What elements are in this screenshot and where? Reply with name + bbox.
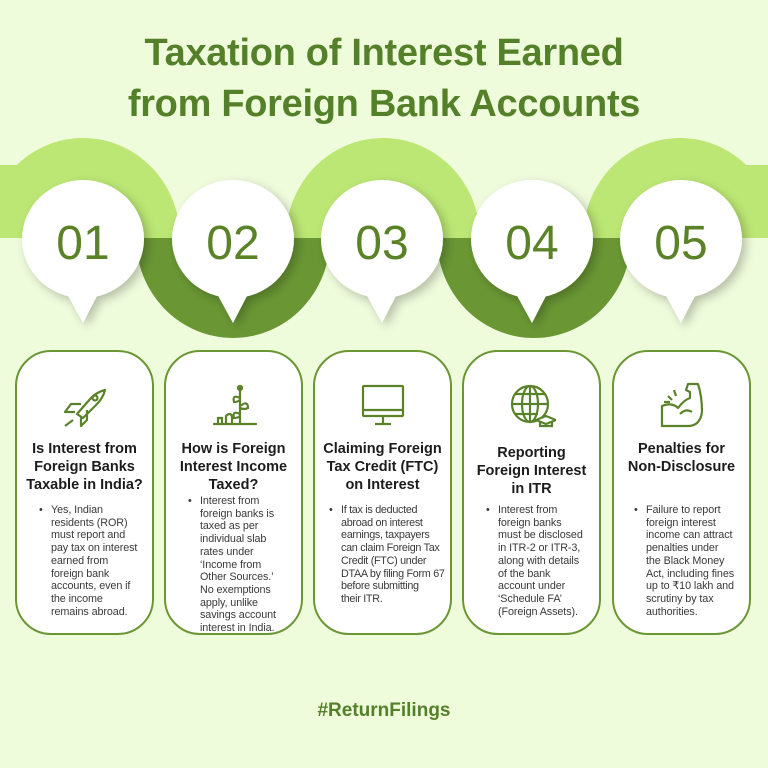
panel 4 — [462, 350, 601, 635]
body text: must report and — [51, 529, 125, 541]
body text: pay tax on interest — [51, 542, 137, 554]
body text: can claim Foreign Tax — [341, 542, 440, 554]
body text: account under — [498, 580, 565, 592]
body text: Interest from — [498, 504, 557, 516]
body text: taxed as per — [200, 520, 258, 532]
body text — [329, 504, 445, 605]
panel 2 — [164, 350, 303, 635]
footer hashtag: #ReturnFilings — [317, 700, 450, 721]
heading: Taxable in India? — [26, 477, 143, 493]
body text: Failure to report — [646, 504, 721, 516]
body text: before submitting — [341, 580, 419, 592]
body text: residents (ROR) — [51, 517, 128, 529]
body text — [188, 495, 276, 634]
title: from Foreign Bank Accounts — [128, 83, 640, 125]
heading: Penalties for — [638, 441, 725, 457]
body text: Credit (FTC) under — [341, 555, 426, 567]
heading: Tax Credit (FTC) — [327, 459, 438, 475]
bubble 05 — [620, 180, 742, 323]
panel 3 — [313, 350, 452, 635]
bubble 05: 05 — [654, 217, 708, 270]
heading: Is Interest from — [32, 441, 137, 457]
body text: of the bank — [498, 568, 550, 580]
bubble 01: 01 — [56, 217, 110, 270]
body text: the Black Money — [646, 555, 724, 567]
icon: rocket — [64, 388, 106, 428]
icon: plant — [212, 384, 258, 426]
icon: flexed arm — [660, 382, 704, 428]
body text: rates under — [200, 546, 254, 558]
body text: foreign banks is — [200, 508, 274, 520]
icon: globe with cap — [510, 384, 556, 428]
heading: Taxed? — [209, 477, 258, 493]
body text: scrutiny by tax — [646, 593, 714, 605]
panel 5 — [612, 350, 751, 635]
body text — [39, 504, 138, 618]
body text — [486, 504, 583, 618]
body text: Yes, Indian — [51, 504, 103, 516]
title: Taxation of Interest Earned — [145, 32, 623, 74]
body text: abroad on interest — [341, 517, 423, 529]
body text — [634, 504, 734, 618]
body text: Other Sources.’ — [200, 571, 274, 583]
heading — [628, 441, 735, 475]
heading: on Interest — [345, 477, 420, 493]
heading — [26, 441, 143, 493]
panel 5: • — [634, 504, 638, 516]
heading — [323, 441, 442, 493]
icon: monitor — [362, 384, 404, 426]
body text: income can attract — [646, 529, 732, 541]
body text: remains abroad. — [51, 606, 128, 618]
body text: their ITR. — [341, 593, 382, 605]
body text: interest in India. — [200, 622, 274, 634]
body text: authorities. — [646, 606, 698, 618]
body text: accounts, even if — [51, 580, 130, 592]
heading: Interest Income — [180, 459, 287, 475]
bubble 02 — [172, 180, 294, 323]
body text: Interest from — [200, 495, 259, 507]
body text: (Foreign Assets). — [498, 606, 578, 618]
heading: Claiming Foreign — [323, 441, 442, 457]
body text: earned from — [51, 555, 108, 567]
heading: Non-Disclosure — [628, 459, 735, 475]
body text: ‘Schedule FA’ — [498, 593, 562, 605]
bubble 03 — [321, 180, 443, 323]
panel 2: • — [188, 495, 192, 507]
panel 3: • — [329, 504, 332, 516]
heading — [180, 441, 287, 493]
bubble 04 — [471, 180, 593, 323]
wave with numbered bubbles — [0, 138, 768, 338]
bubble 04: 04 — [505, 217, 559, 270]
body text: along with details — [498, 555, 579, 567]
body text: DTAA by filing Form 67 — [341, 568, 445, 580]
panel 4: • — [486, 504, 490, 516]
heading: Foreign Banks — [34, 459, 135, 475]
heading — [477, 445, 586, 497]
heading: Foreign Interest — [477, 463, 586, 479]
body text: apply, unlike — [200, 597, 258, 609]
panel 1 — [15, 350, 154, 635]
heading: Reporting — [497, 445, 566, 461]
body text: foreign bank — [51, 568, 109, 580]
body text: If tax is deducted — [341, 504, 417, 516]
body text: foreign banks — [498, 517, 562, 529]
body text: Act, including fines — [646, 568, 734, 580]
title — [128, 32, 640, 125]
body text: foreign interest — [646, 517, 716, 529]
body text: ‘Income from — [200, 559, 261, 571]
body text: up to ₹10 lakh and — [646, 580, 734, 592]
body text: No exemptions — [200, 584, 271, 596]
heading: How is Foreign — [182, 441, 285, 457]
body text: savings account — [200, 609, 276, 621]
body text: penalties under — [646, 542, 718, 554]
panel 1: • — [39, 504, 43, 516]
body text: in ITR-2 or ITR-3, — [498, 542, 580, 554]
body text: individual slab — [200, 533, 266, 545]
body text: must be disclosed — [498, 529, 583, 541]
heading: in ITR — [511, 481, 552, 497]
body text: the income — [51, 593, 103, 605]
bubble 03: 03 — [355, 217, 409, 270]
body text: earnings, taxpayers — [341, 529, 430, 541]
bubble 01 — [22, 180, 144, 323]
bubble 02: 02 — [206, 217, 260, 270]
